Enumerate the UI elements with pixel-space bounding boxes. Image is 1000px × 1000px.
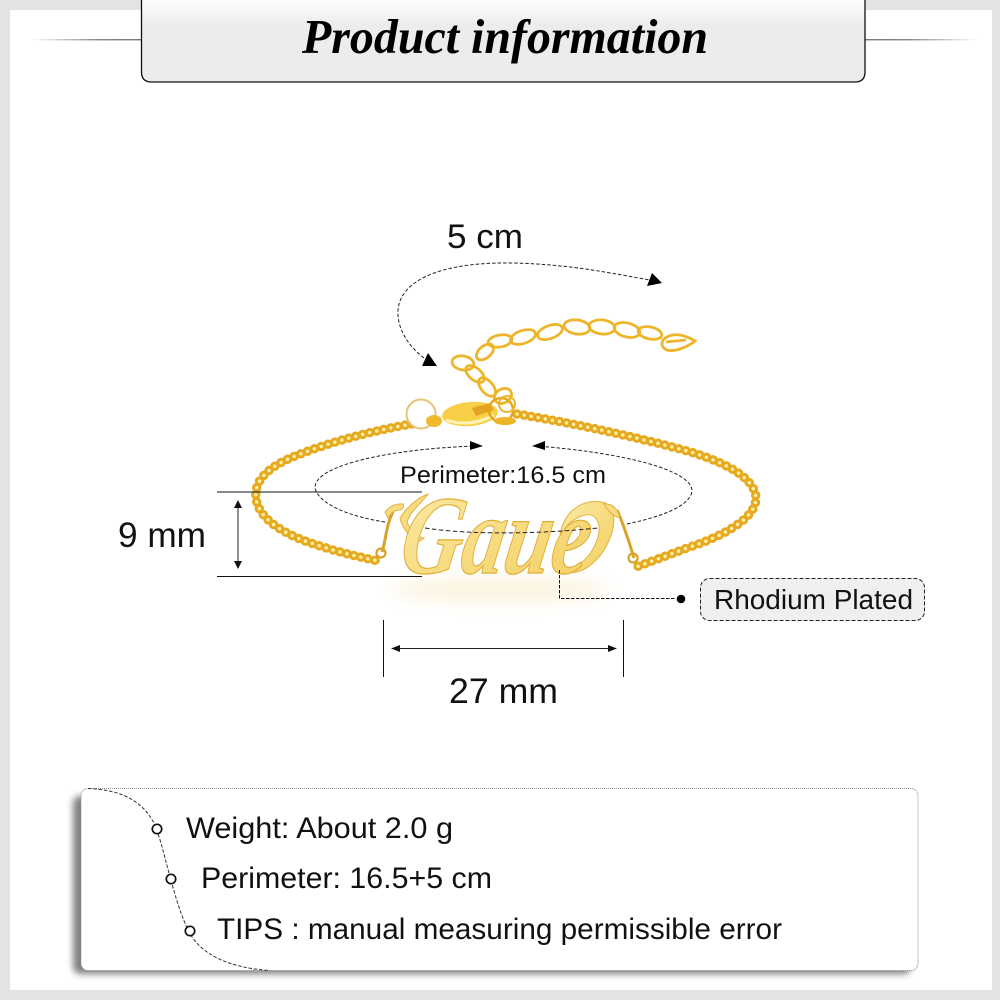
bracelet photo [256, 318, 756, 603]
label: 9 mm: 9 mm [118, 516, 206, 555]
right chain [517, 414, 756, 567]
panel: specifications [73, 788, 918, 974]
arrow: extender length [398, 263, 662, 366]
clasp [406, 396, 516, 428]
label: perimeter: Perimeter:16.5 cm [400, 462, 606, 489]
timeline node 3 [185, 926, 195, 936]
dashed timeline [88, 788, 270, 970]
nameplate connectors [376, 510, 638, 562]
spec: perimeter: Perimeter: 16.5+5 cm [201, 862, 492, 895]
title: Product information [301, 9, 708, 64]
timeline node 1 [152, 824, 162, 834]
label: 27 mm: 27 mm [449, 672, 558, 711]
label: extender length: 5 cm [447, 218, 523, 256]
header rule left [32, 39, 142, 40]
extender chain [451, 318, 695, 407]
spec: weight: Weight: About 2.0 g [186, 812, 453, 845]
dimension: width 27 mm [384, 620, 624, 711]
spec: tips: TIPS : manual measuring permissible error [217, 913, 782, 946]
timeline node 2 [166, 874, 176, 884]
dimension: height 9 mm [118, 492, 422, 576]
callout: rhodium plated: Rhodium Plated [714, 584, 913, 615]
reflection under nameplate [390, 577, 610, 603]
perimeter arrow [315, 441, 692, 533]
nameplate: Gaue [393, 474, 602, 598]
header tab [142, 0, 865, 82]
callout: rhodium plated [560, 570, 924, 620]
header rule right [865, 39, 977, 40]
left chain [256, 424, 412, 561]
